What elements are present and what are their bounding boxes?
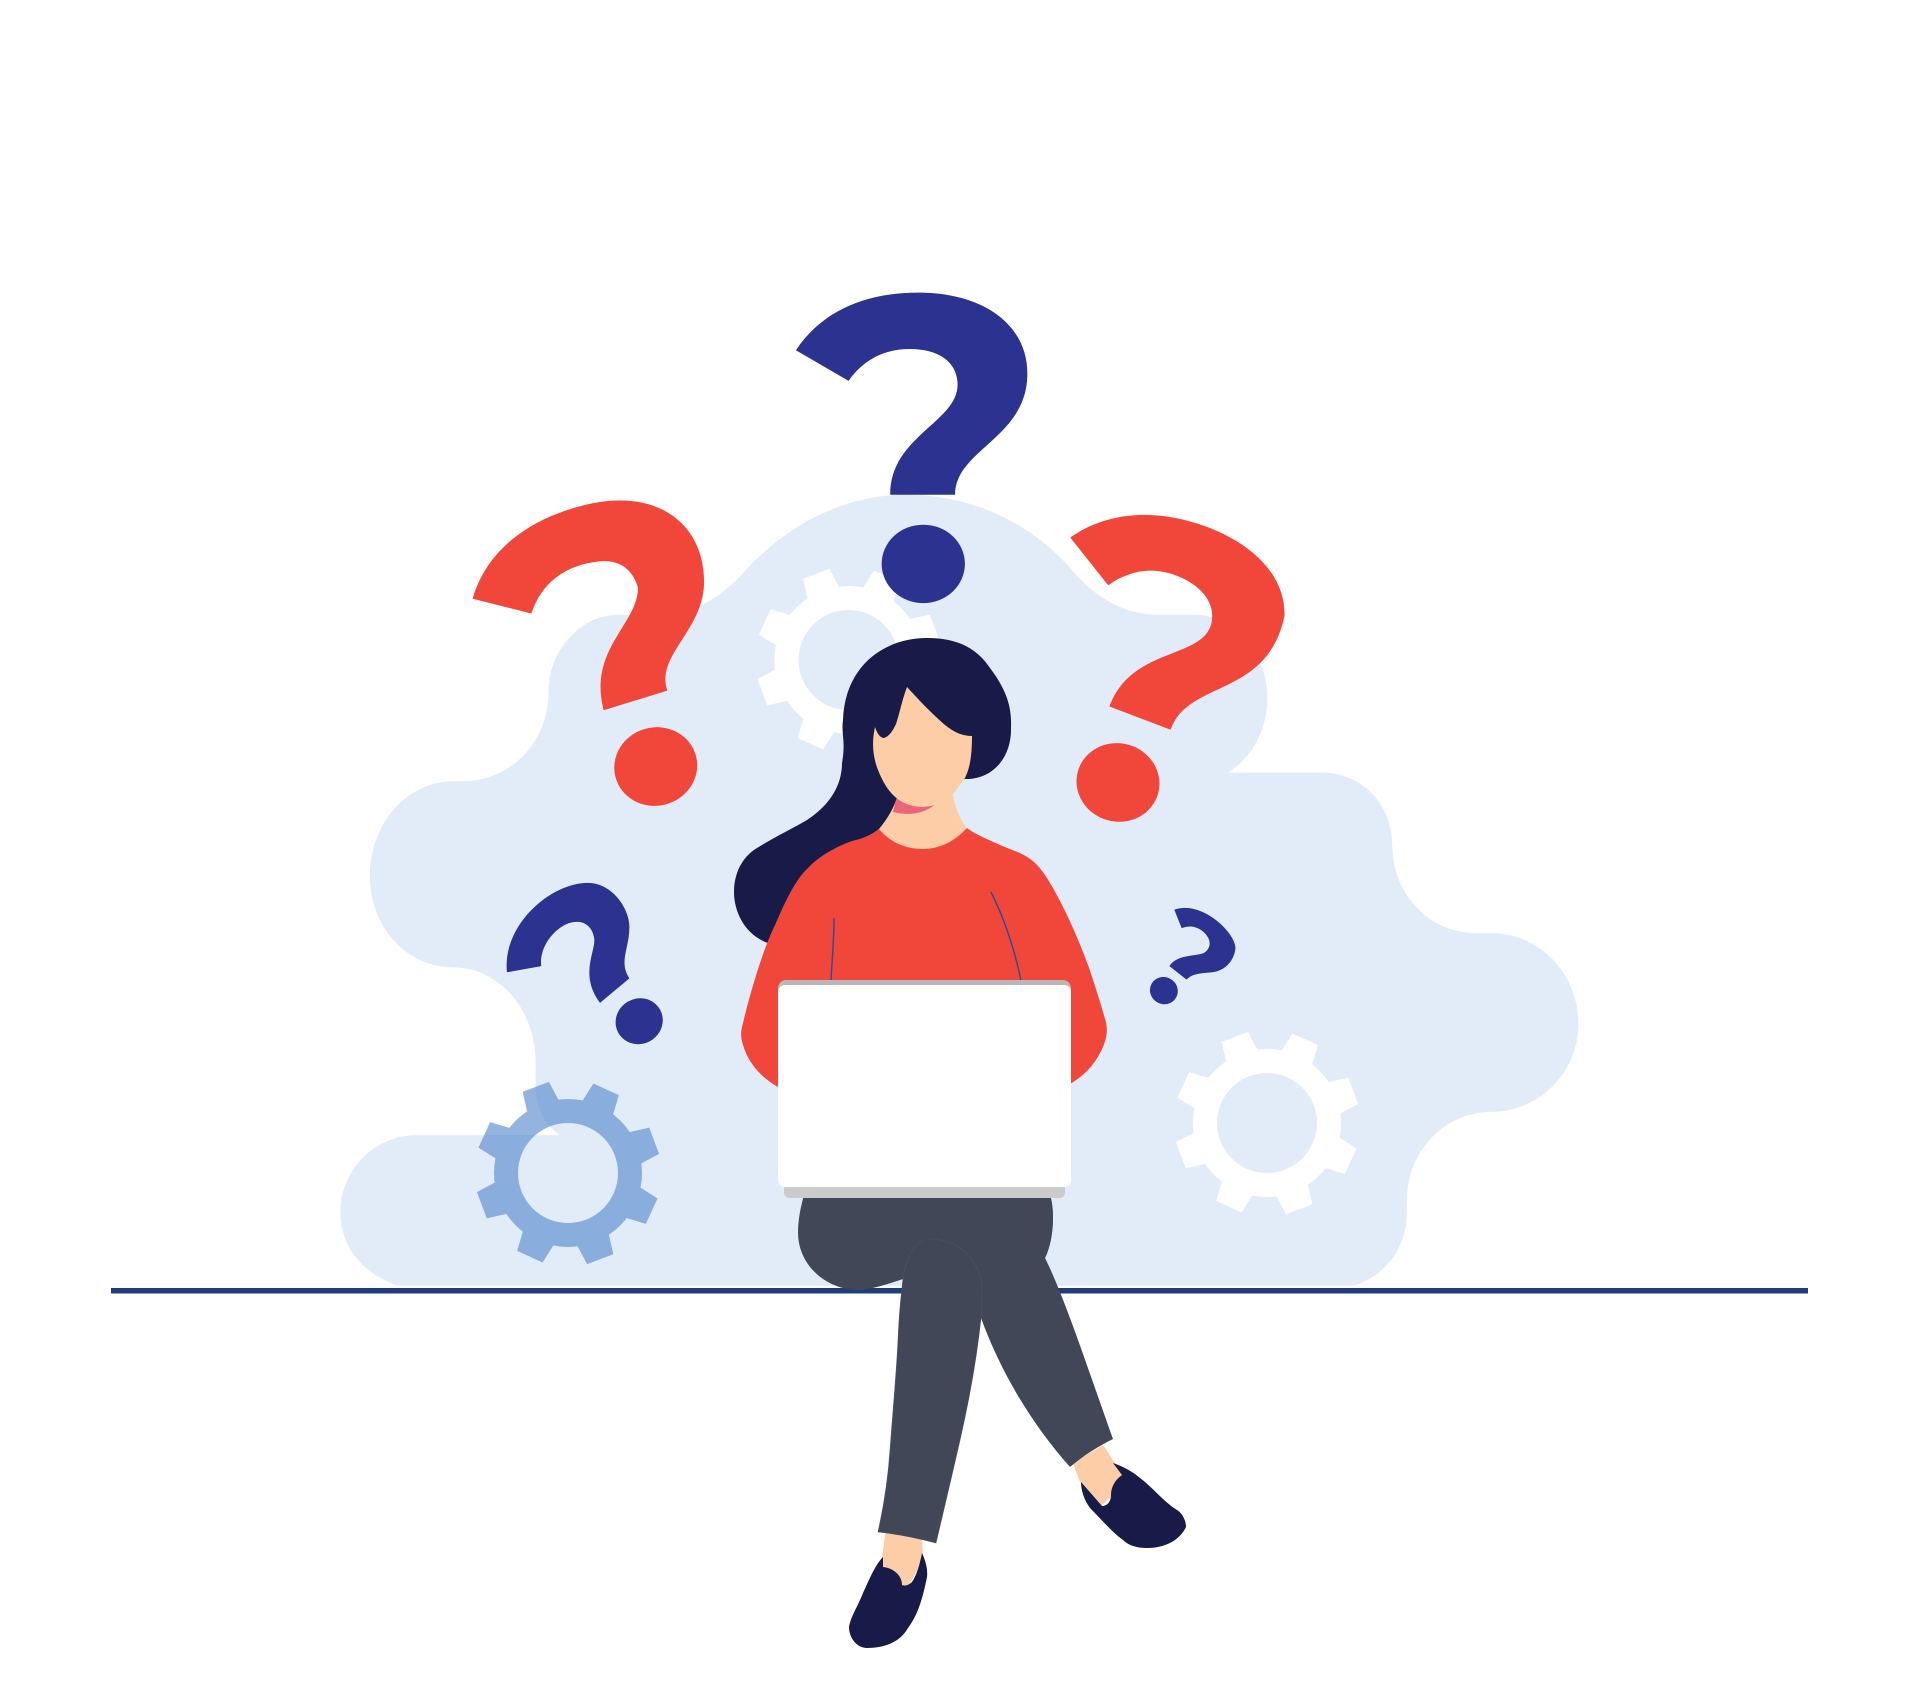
left foot skin and shoe — [849, 1528, 927, 1648]
hair — [734, 638, 1011, 943]
neck — [879, 790, 967, 849]
sweater seams — [831, 892, 1021, 981]
gear: blue gear — [476, 1081, 660, 1265]
icon: large blue question mark — [796, 293, 1027, 603]
face — [873, 687, 972, 807]
gear: top white gear — [756, 568, 941, 752]
ground line — [111, 1288, 1808, 1294]
icon: left red question mark — [473, 500, 706, 815]
neck shadow — [893, 795, 937, 814]
icon: right red question mark — [1068, 515, 1285, 831]
right foot skin and shoe — [1073, 1445, 1186, 1548]
laptop screen back — [778, 985, 1071, 1187]
woman figure — [734, 638, 1186, 1648]
far leg — [960, 1195, 1113, 1467]
near leg — [878, 1239, 982, 1543]
icon: small right blue question mark — [1145, 908, 1236, 1009]
gear: right white gear — [1175, 1031, 1359, 1215]
sweater — [741, 828, 1107, 1087]
seat and hips — [798, 1195, 1053, 1290]
laptop — [778, 980, 1071, 1198]
background blob — [340, 495, 1578, 1286]
laptop base — [784, 1180, 1065, 1198]
laptop lid rim — [778, 980, 1071, 1020]
icon: small left blue question mark — [507, 883, 671, 1053]
